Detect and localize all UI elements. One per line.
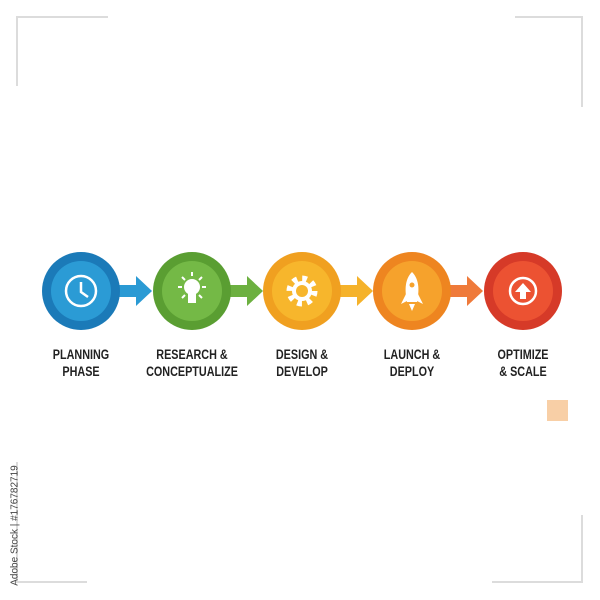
label 3: DESIGN & — [276, 347, 328, 362]
label 3 — [276, 347, 328, 379]
label 1 — [53, 347, 109, 379]
step 5 circle: refresh up — [484, 252, 562, 330]
arrow 1 — [115, 276, 152, 306]
label 3: DEVELOP — [276, 364, 328, 379]
label 2 — [146, 347, 238, 379]
arrow 4 — [446, 276, 483, 306]
label 5: OPTIMIZE — [498, 347, 548, 362]
step 1 circle: clock — [42, 252, 120, 330]
step 2 circle: bulb — [153, 252, 231, 330]
step 3 circle: gear — [263, 252, 341, 330]
label 4: DEPLOY — [390, 364, 434, 379]
label 5: & SCALE — [499, 364, 547, 379]
watermark id: Adobe Stock | #176782719 — [10, 465, 20, 586]
label 1: PHASE — [62, 364, 100, 379]
label 2: RESEARCH & — [156, 347, 228, 362]
label 4: LAUNCH & — [384, 347, 440, 362]
label 2: CONCEPTUALIZE — [146, 364, 238, 379]
label 1: PLANNING — [53, 347, 109, 362]
label 4 — [384, 347, 440, 379]
peach square — [547, 400, 568, 421]
arrow 3 — [336, 276, 373, 306]
arrow 2 — [226, 276, 263, 306]
label 5 — [498, 347, 548, 379]
step 4 circle: rocket — [373, 252, 451, 330]
